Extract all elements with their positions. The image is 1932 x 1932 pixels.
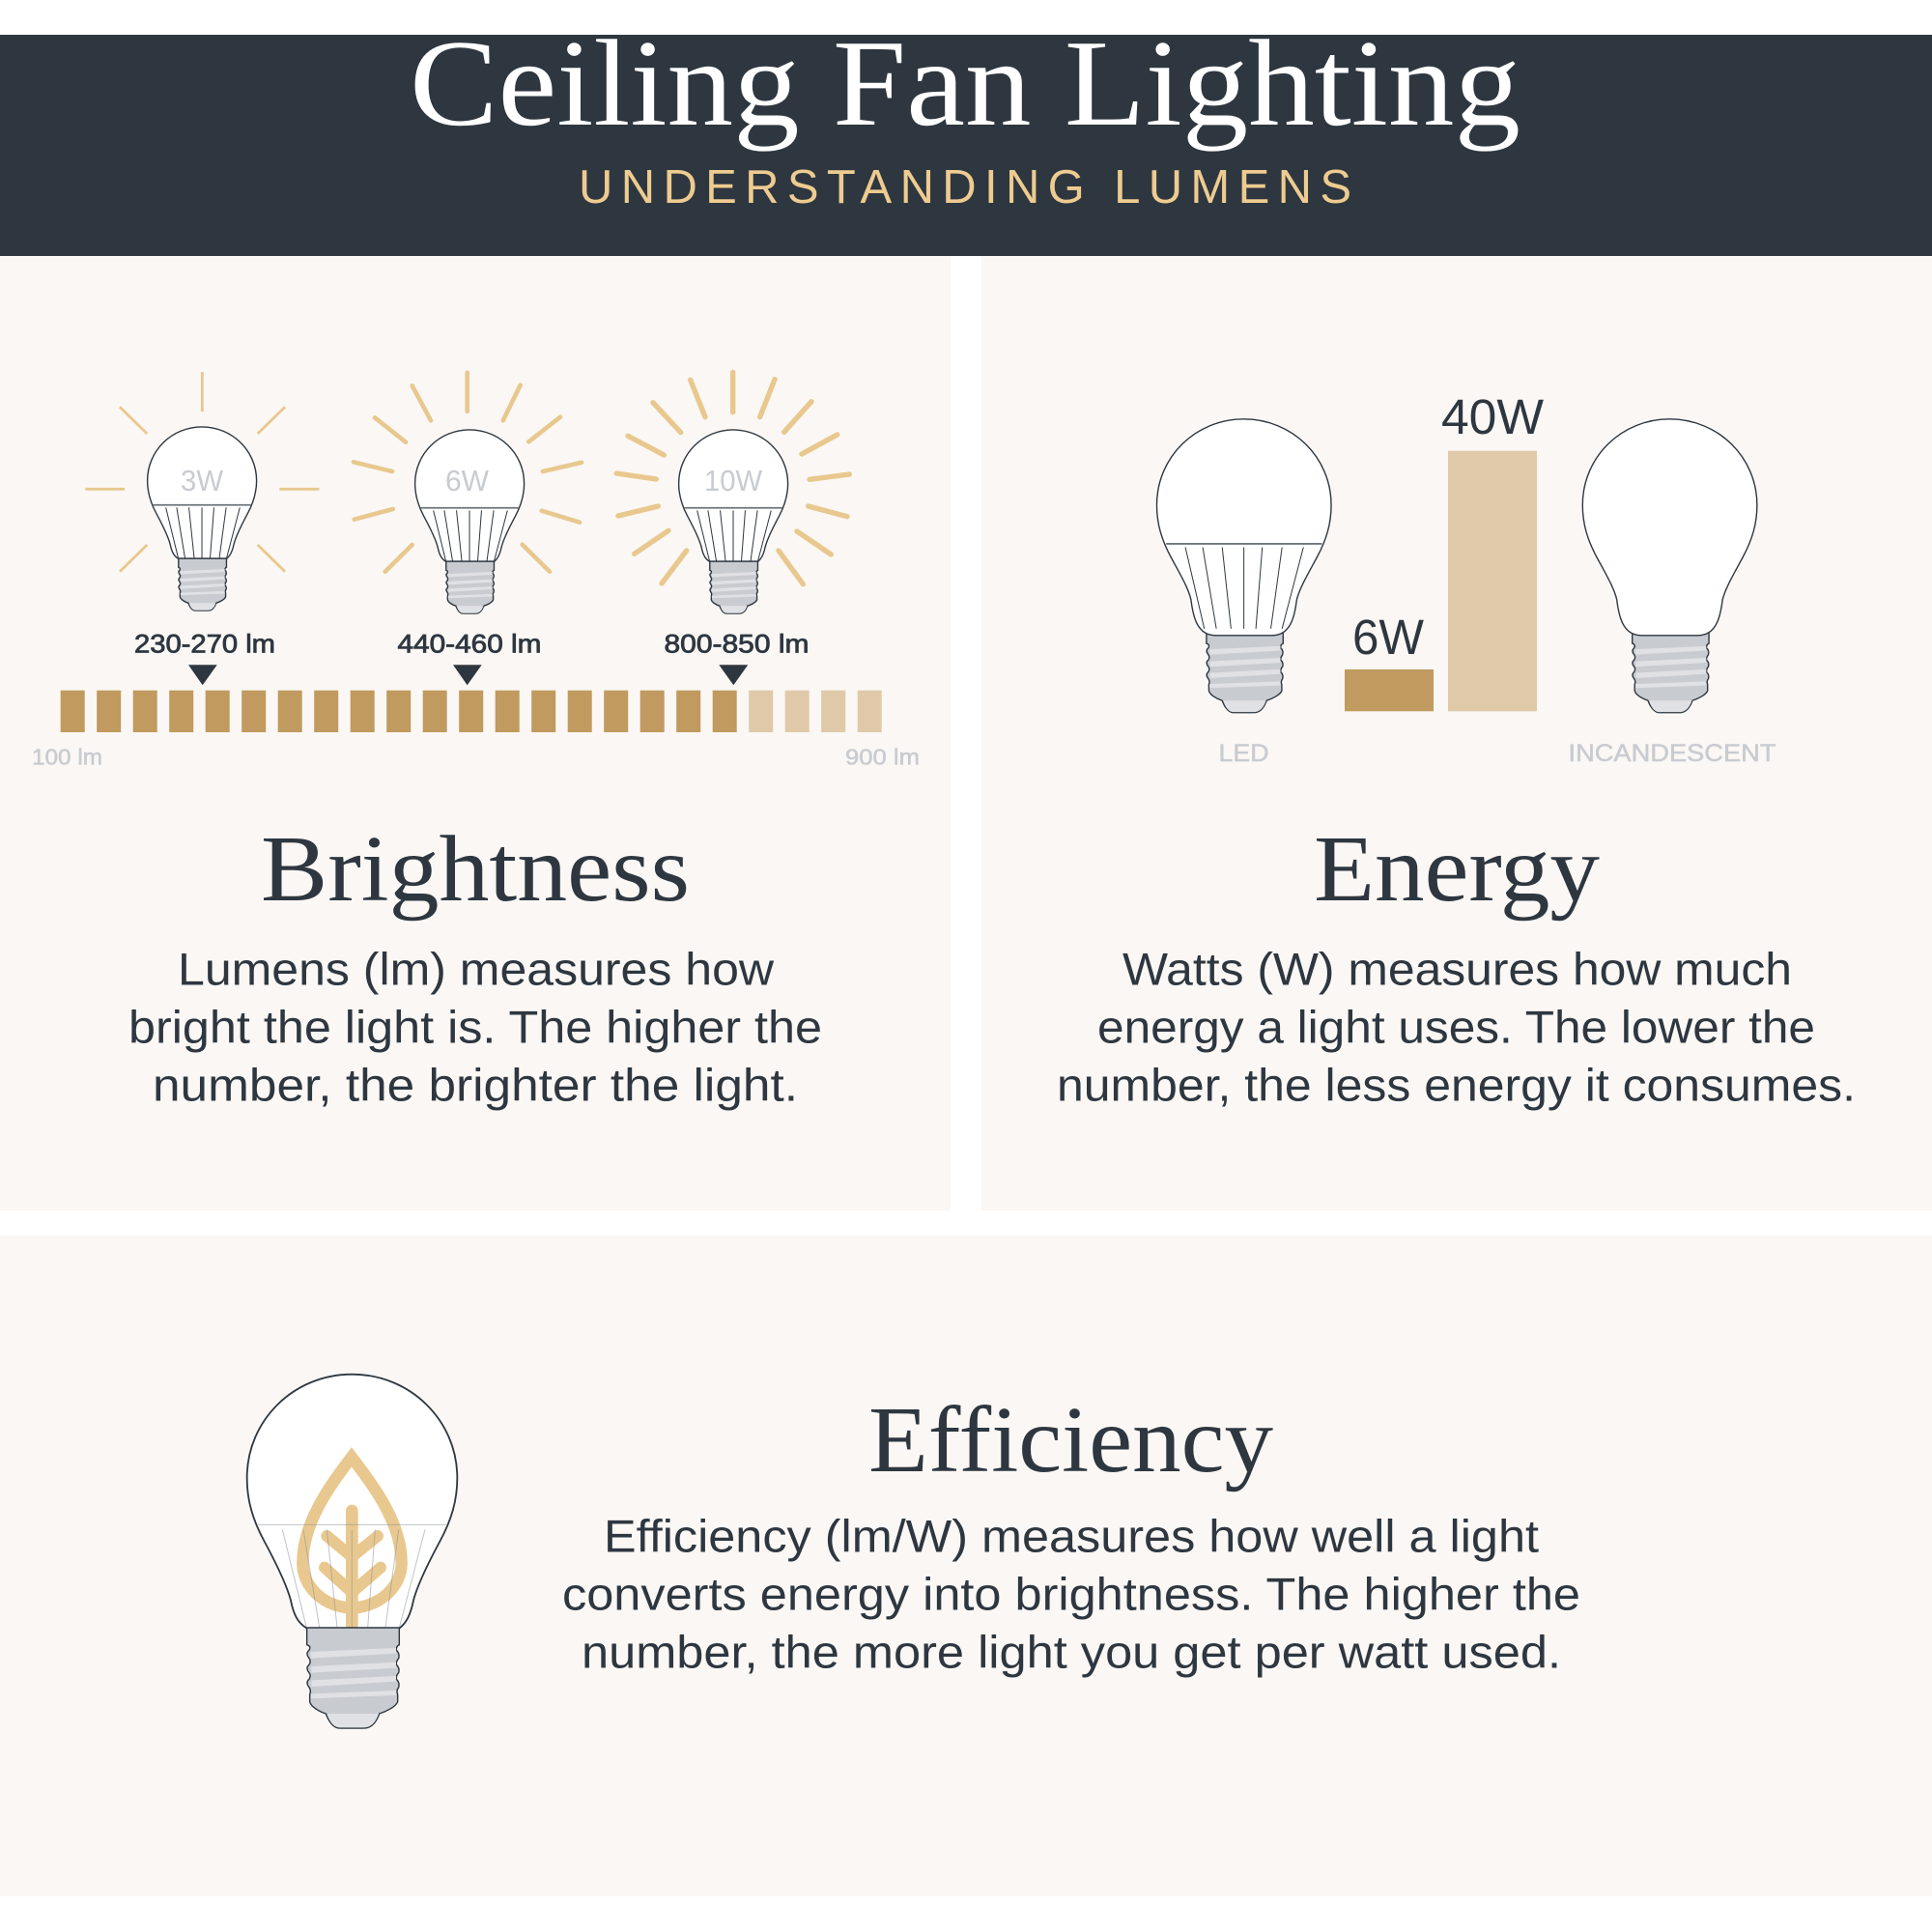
icon: 6W bulb with rays	[354, 373, 582, 613]
icon: 10W bulb with rays	[616, 372, 849, 613]
heading: efficiency: Efficiency	[868, 1388, 1274, 1492]
title: Ceiling Fan Lighting	[410, 14, 1520, 152]
panel: efficiency	[0, 1236, 1932, 1896]
label: incandescent: INCANDESCENT	[1569, 740, 1776, 767]
text block: energy: energy a light uses. The lower the	[1097, 1001, 1815, 1053]
scale start label: 100 lm	[32, 744, 102, 769]
icon: 10W bulb with rays: 10W	[704, 464, 763, 497]
label: 6W: 6W	[1352, 610, 1424, 665]
text block: brightness: number, the brighter the light.	[153, 1059, 798, 1111]
text block: brightness: bright the light is. The higher the	[128, 1001, 822, 1053]
marker: 440-460 lm	[453, 665, 482, 685]
icon: leaf	[302, 1457, 402, 1626]
label: 40W: 40W	[1441, 389, 1544, 444]
icon: 6W bulb with rays: 6W	[445, 464, 490, 497]
heading: brightness: Brightness	[261, 817, 690, 921]
label: 230-270 lm: 230-270 lm	[134, 630, 275, 659]
label: 440-460 lm: 440-460 lm	[398, 630, 541, 659]
text block: brightness	[128, 943, 822, 1111]
label: LED: LED	[1219, 740, 1269, 767]
scale end label: 900 lm	[845, 744, 920, 769]
header band	[0, 14, 1932, 256]
text block: efficiency	[562, 1511, 1580, 1677]
lumen scale bar	[61, 691, 882, 732]
heading: energy: Energy	[1314, 817, 1601, 921]
marker: 800-850 lm	[719, 665, 748, 685]
text block: efficiency: number, the more light you get per watt used.	[582, 1627, 1561, 1677]
text block: energy: number, the less energy it consumes.	[1057, 1059, 1856, 1111]
text block: efficiency: Efficiency (lm/W) measures how well a light	[604, 1511, 1539, 1561]
icon: bulb with leaf	[247, 1375, 457, 1728]
text block: energy: Watts (W) measures how much	[1122, 943, 1792, 995]
text block: brightness: Lumens (lm) measures how	[178, 943, 775, 995]
icon: incandescent bulb	[1582, 419, 1757, 713]
subtitle: UNDERSTANDING LUMENS	[579, 161, 1351, 213]
bar: LED 6W	[1345, 669, 1434, 711]
text block: energy	[1057, 943, 1856, 1111]
panel: energy	[981, 256, 1932, 1210]
icon: 3W bulb with rays: 3W	[181, 464, 224, 497]
icon: LED bulb	[1156, 419, 1331, 713]
text block: efficiency: converts energy into brightness. The higher the	[562, 1569, 1580, 1619]
panel: brightness	[0, 256, 951, 1210]
marker: 230-270 lm	[188, 665, 217, 685]
bar: incandescent 40W	[1448, 451, 1537, 711]
icon: 3W bulb with rays	[85, 372, 319, 611]
label: 800-850 lm: 800-850 lm	[665, 630, 810, 659]
